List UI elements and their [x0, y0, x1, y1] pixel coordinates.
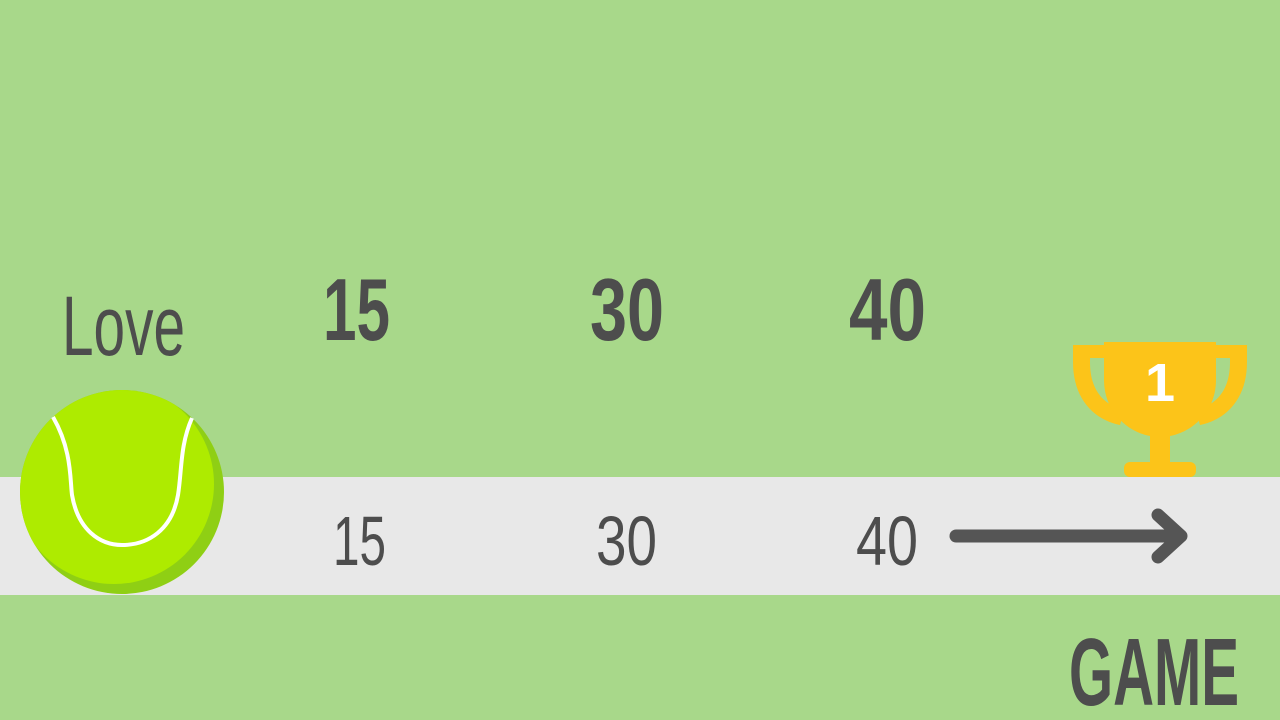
- band number 15: 15: [333, 502, 386, 580]
- icon: tennis ball: [14, 384, 224, 594]
- score band: [0, 477, 1280, 595]
- heading: 30: 30: [590, 260, 664, 359]
- trophy number: 1: [1145, 353, 1175, 413]
- heading: 15: 15: [323, 260, 390, 359]
- label: Love: Love: [62, 279, 185, 373]
- heading: 40: 40: [849, 260, 926, 359]
- band number 40: 40: [856, 502, 918, 580]
- band number 30: 30: [596, 502, 657, 580]
- arrow: [956, 515, 1181, 557]
- icon: trophy: [1073, 342, 1247, 477]
